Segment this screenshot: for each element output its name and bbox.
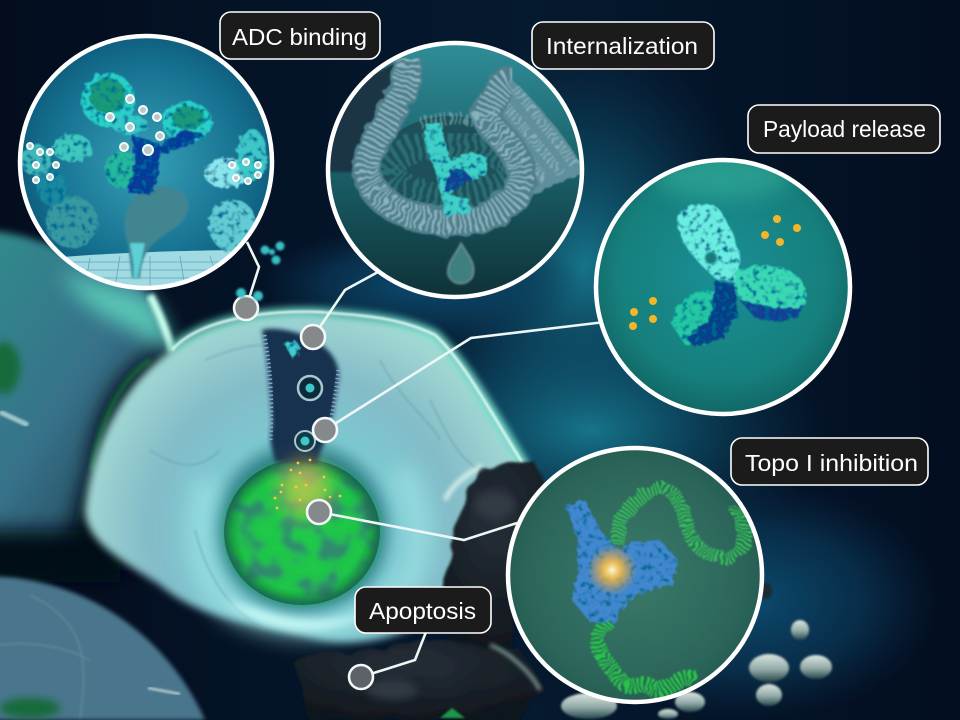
right membrane sheet (502, 79, 580, 195)
surface ADC (285, 340, 302, 358)
internalization tube (262, 329, 339, 465)
cleavage glow (587, 545, 637, 595)
topoisomerase I (566, 500, 678, 622)
panel: Topo I inhibition (508, 448, 762, 702)
payload molecules (629, 215, 801, 330)
glowing membrane (172, 312, 530, 475)
vesicle 2 (295, 431, 315, 451)
vesicle interior (381, 116, 506, 190)
pale ring around nucleus (200, 470, 419, 627)
label: Payload release (748, 105, 940, 153)
nucleus (226, 461, 378, 603)
label: Payload release: Payload release (763, 116, 926, 142)
connector lines (246, 242, 605, 677)
label: Apoptosis: Apoptosis (369, 598, 476, 624)
released antibody (670, 204, 806, 347)
label: Topo I inhibition (731, 438, 928, 485)
label: Internalization: Internalization (546, 33, 698, 59)
central antibody (81, 73, 212, 195)
payload glow (281, 460, 329, 516)
nucleus dark rim (224, 459, 380, 605)
internalised antibody (425, 122, 488, 215)
payload sparks (274, 459, 341, 509)
pale halo below nucleus (225, 600, 390, 630)
panel: ADC binding (20, 36, 272, 288)
antigen droplet (448, 243, 474, 284)
tube lipids (264, 335, 339, 440)
membrane band (367, 60, 521, 222)
DNA strand (598, 488, 745, 691)
centre antigen (124, 186, 189, 278)
left dark membrane sheet (320, 58, 405, 172)
payload dots (27, 95, 261, 184)
main cell (85, 311, 535, 642)
panel: Internalization (320, 43, 585, 297)
label: ADC binding (220, 12, 380, 59)
free ADC (260, 242, 284, 264)
neighbouring cell: upper left (0, 230, 175, 582)
label: Internalization (532, 22, 714, 69)
membrane floor (66, 250, 232, 286)
debris boulders (561, 583, 832, 719)
vesicle 1 (298, 376, 322, 400)
connector nodes (234, 296, 373, 689)
left antibody (21, 134, 98, 248)
label: Apoptosis (355, 587, 491, 633)
label: ADC binding: ADC binding (232, 24, 367, 50)
bound ADC (236, 288, 263, 301)
dark debris rocks (296, 462, 560, 720)
panel: Payload release (596, 150, 850, 414)
right antibody (204, 129, 267, 252)
label: Topo I inhibition: Topo I inhibition (745, 450, 918, 476)
cell veins (150, 345, 480, 630)
neighbouring cell: lower left (0, 576, 205, 720)
